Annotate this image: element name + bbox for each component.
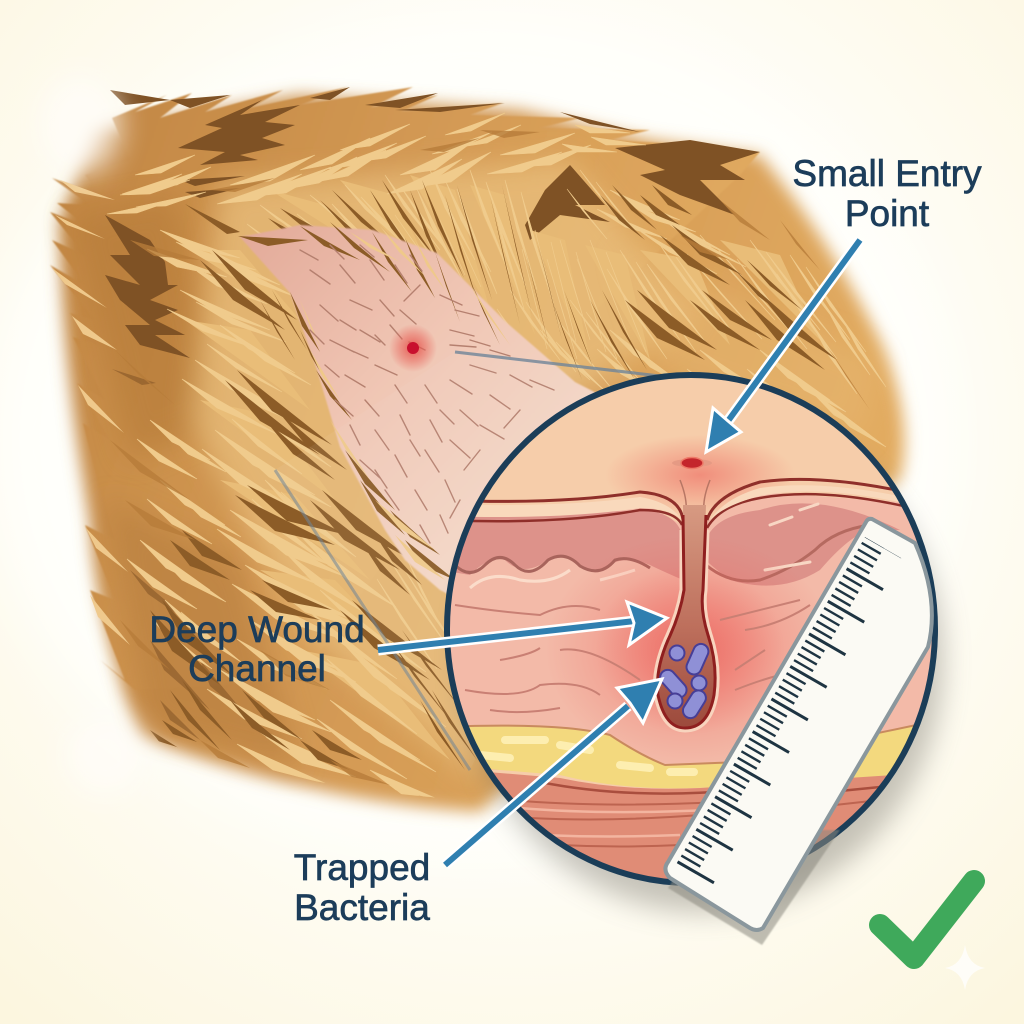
skin hairs	[300, 245, 554, 543]
white halo behind fur	[0, 30, 950, 850]
label: deep wound channel: Deep Wound	[149, 609, 365, 650]
arrow: deep wound channel	[378, 602, 667, 650]
light fur strands	[107, 113, 886, 819]
border fur tufts	[185, 204, 530, 580]
inflammation glow	[568, 563, 806, 748]
entry wound on skin	[389, 324, 437, 372]
broad fur clumps	[185, 175, 820, 760]
entry point on surface	[672, 458, 712, 468]
dark fur patches	[105, 87, 760, 740]
ruler	[665, 519, 932, 945]
trapped bacteria cluster	[657, 642, 711, 721]
dark fur strands	[150, 180, 837, 770]
ruler ticks	[686, 543, 883, 874]
label: small entry point: Point	[845, 193, 930, 234]
shadow of magnifier	[463, 408, 943, 912]
wound channel	[657, 480, 715, 728]
muscle layer	[493, 772, 886, 879]
magnifier connector lines	[275, 352, 660, 770]
icon: sparkle	[945, 945, 985, 990]
label: trapped bacteria: Trapped	[294, 847, 430, 888]
arrow: small entry point	[706, 240, 860, 452]
arrow: trapped bacteria	[445, 679, 662, 865]
upper dermis band	[440, 503, 900, 586]
label: trapped bacteria: Bacteria	[294, 887, 430, 928]
fat layer	[468, 724, 914, 788]
soft fade on fur corners	[40, 75, 145, 795]
label: deep wound channel: Channel	[188, 648, 326, 689]
icon: green check mark	[880, 881, 974, 958]
shaved skin patch	[185, 204, 610, 610]
dermis fibres	[455, 600, 810, 712]
tonal fur bands	[70, 160, 880, 780]
medium fur strands	[110, 130, 870, 785]
label: small entry point: Small Entry	[792, 153, 982, 194]
surface lines	[482, 490, 684, 520]
dermis	[440, 492, 940, 770]
magnified cross-section	[440, 370, 940, 890]
fur coat	[50, 87, 904, 819]
top skin surface	[617, 440, 782, 510]
